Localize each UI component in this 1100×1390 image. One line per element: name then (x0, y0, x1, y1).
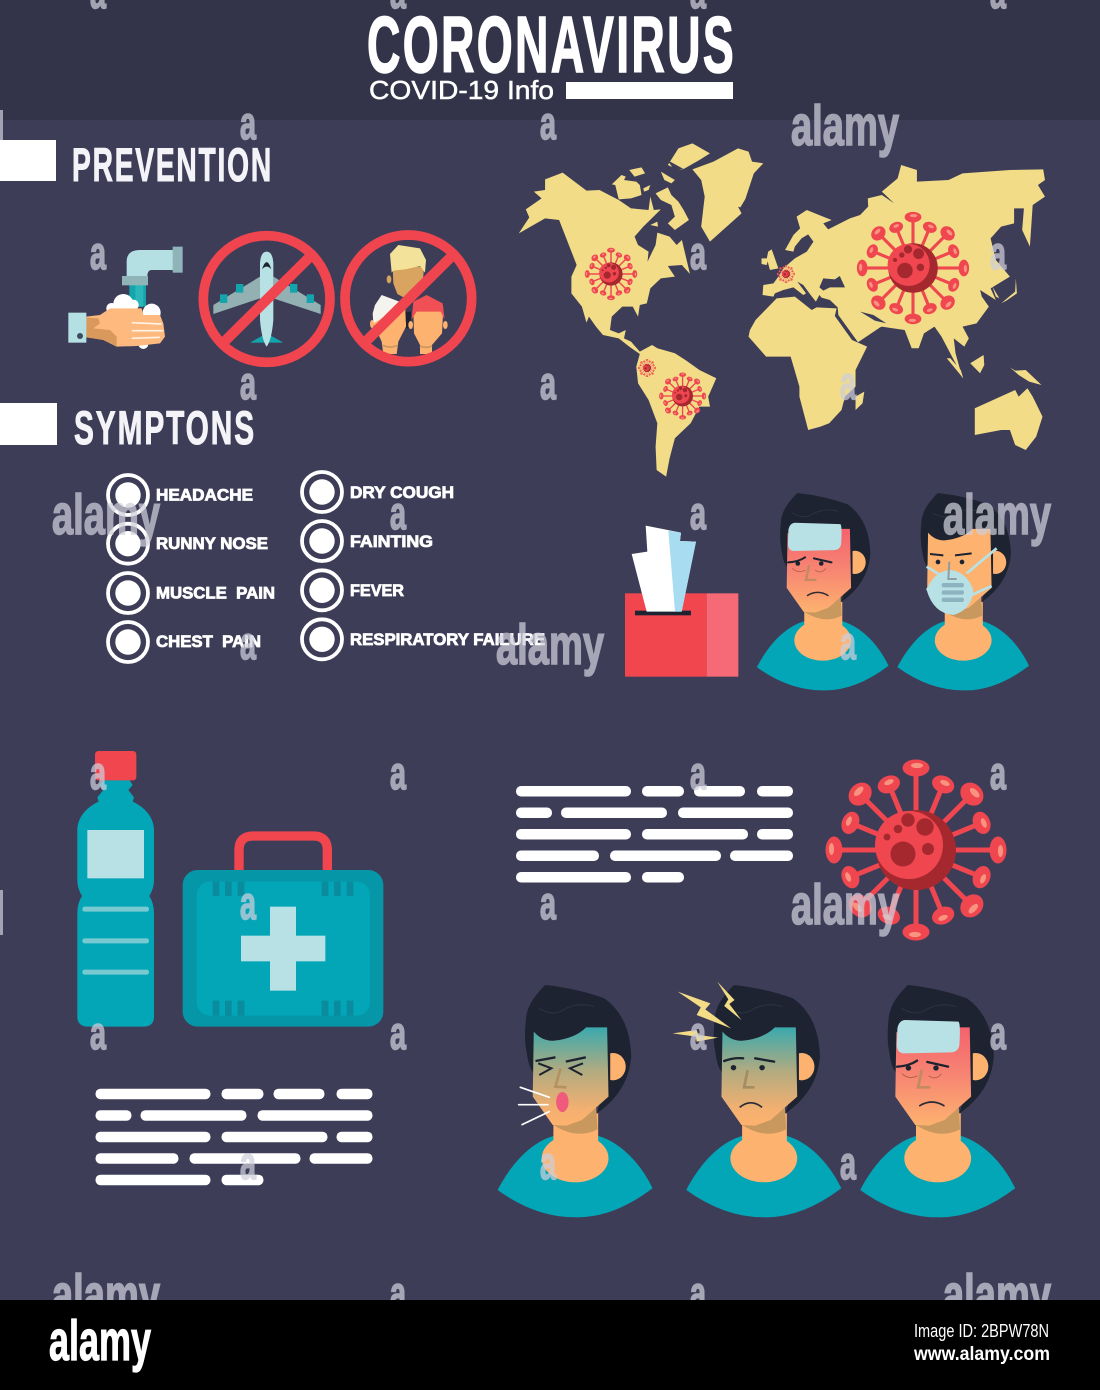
watermarks: a (90, 227, 106, 279)
symptom: muscle pain: MUSCLE PAIN (156, 584, 275, 602)
map: eurasia (763, 165, 1045, 378)
watermarks: alamy (791, 94, 899, 158)
watermarks: a (540, 97, 556, 149)
icon: no flights (203, 236, 330, 362)
symptom: runny nose: RUNNY NOSE (156, 535, 268, 553)
symptoms list (108, 472, 545, 662)
text placeholder bars: right (516, 786, 793, 882)
watermarks: a (390, 747, 406, 799)
symptom: chest pain (108, 622, 261, 662)
icon: large coronavirus (826, 760, 1006, 940)
symptom: chest pain: CHEST PAIN (156, 633, 261, 651)
symptom: dry cough (302, 472, 454, 512)
person: fever (860, 985, 1015, 1217)
person: headache with lightning (673, 982, 841, 1217)
symptom: respiratory failure: RESPIRATORY FAILURE (350, 631, 545, 649)
watermarks: a (90, 1007, 106, 1059)
icon: hand washing (68, 247, 183, 349)
watermarks: a (90, 747, 106, 799)
watermarks: a (390, 1267, 406, 1319)
symptom: fever (302, 570, 404, 610)
virus marker: brazil (659, 372, 706, 420)
watermarks: alamy (52, 483, 160, 547)
heading: symptoms: SYMPTONS (74, 401, 256, 454)
header band (0, 0, 1100, 120)
heading: symptoms (0, 401, 256, 454)
watermarks: a (390, 1007, 406, 1059)
icon: first aid kit (183, 836, 383, 1027)
watermarks: a (240, 877, 256, 929)
watermarks: a (540, 1137, 556, 1189)
watermarks: a (240, 1137, 256, 1189)
heading: prevention: PREVENTION (72, 138, 273, 191)
watermarks: a (240, 97, 256, 149)
symptom: dry cough: DRY COUGH (350, 484, 454, 502)
symptom: muscle pain (108, 573, 275, 613)
watermarks: a (690, 747, 706, 799)
icon: no contact (345, 235, 472, 362)
symptom: respiratory failure (302, 619, 545, 659)
world map (519, 143, 1045, 477)
watermarks: alamy (52, 1263, 160, 1327)
watermarks: a (690, 1007, 706, 1059)
watermarks: a (840, 1137, 856, 1189)
watermarks: alamy (943, 1263, 1051, 1327)
virus marker: peru (638, 359, 656, 377)
icon: tissue box (625, 526, 738, 677)
text placeholder bars: left (96, 1089, 372, 1185)
virus marker: europe (777, 265, 795, 283)
symptom: headache: HEADACHE (156, 486, 253, 504)
virus marker: asia (857, 212, 969, 324)
watermarks: a (240, 357, 256, 409)
watermarks: a (240, 617, 256, 669)
person: fever with cold pack (757, 493, 889, 690)
watermarks: a (690, 1267, 706, 1319)
map: africa (749, 297, 867, 430)
watermarks: a (990, 1007, 1006, 1059)
map: australia (975, 388, 1043, 450)
title (367, 0, 736, 105)
footer logo: alamy (49, 1309, 151, 1373)
symptom: runny nose (108, 524, 268, 564)
title: COVID-19 Info (369, 75, 554, 105)
watermarks: alamy (943, 483, 1051, 547)
person: wearing mask (897, 493, 1029, 690)
watermarks: alamy (791, 873, 899, 937)
website: www.alamy.com (913, 1344, 1050, 1365)
watermarks: a (390, 487, 406, 539)
footer bar (0, 1300, 1100, 1390)
virus marker: north america (585, 248, 637, 300)
symptom: fainting (302, 521, 433, 561)
icon: lightning bolts (673, 982, 741, 1042)
watermarks: a (990, 227, 1006, 279)
watermarks: a (840, 617, 856, 669)
image id: Image ID: 2BPW78N (914, 1321, 1049, 1341)
watermarks: a (840, 357, 856, 409)
watermarks: alamy (496, 613, 604, 677)
watermarks: a (990, 747, 1006, 799)
heading: prevention (0, 138, 273, 191)
symptom: headache (108, 475, 253, 515)
map: inland seas (819, 276, 845, 291)
map: americas (519, 173, 716, 477)
symptom: fever: FEVER (350, 582, 404, 600)
person: coughing (498, 985, 653, 1217)
watermarks: a (690, 487, 706, 539)
symptom: fainting: FAINTING (350, 533, 433, 551)
watermarks: a (690, 227, 706, 279)
title: CORONAVIRUS (367, 0, 736, 89)
watermarks: a (540, 357, 556, 409)
watermarks: a (540, 877, 556, 929)
icon: water bottle (77, 751, 154, 1027)
